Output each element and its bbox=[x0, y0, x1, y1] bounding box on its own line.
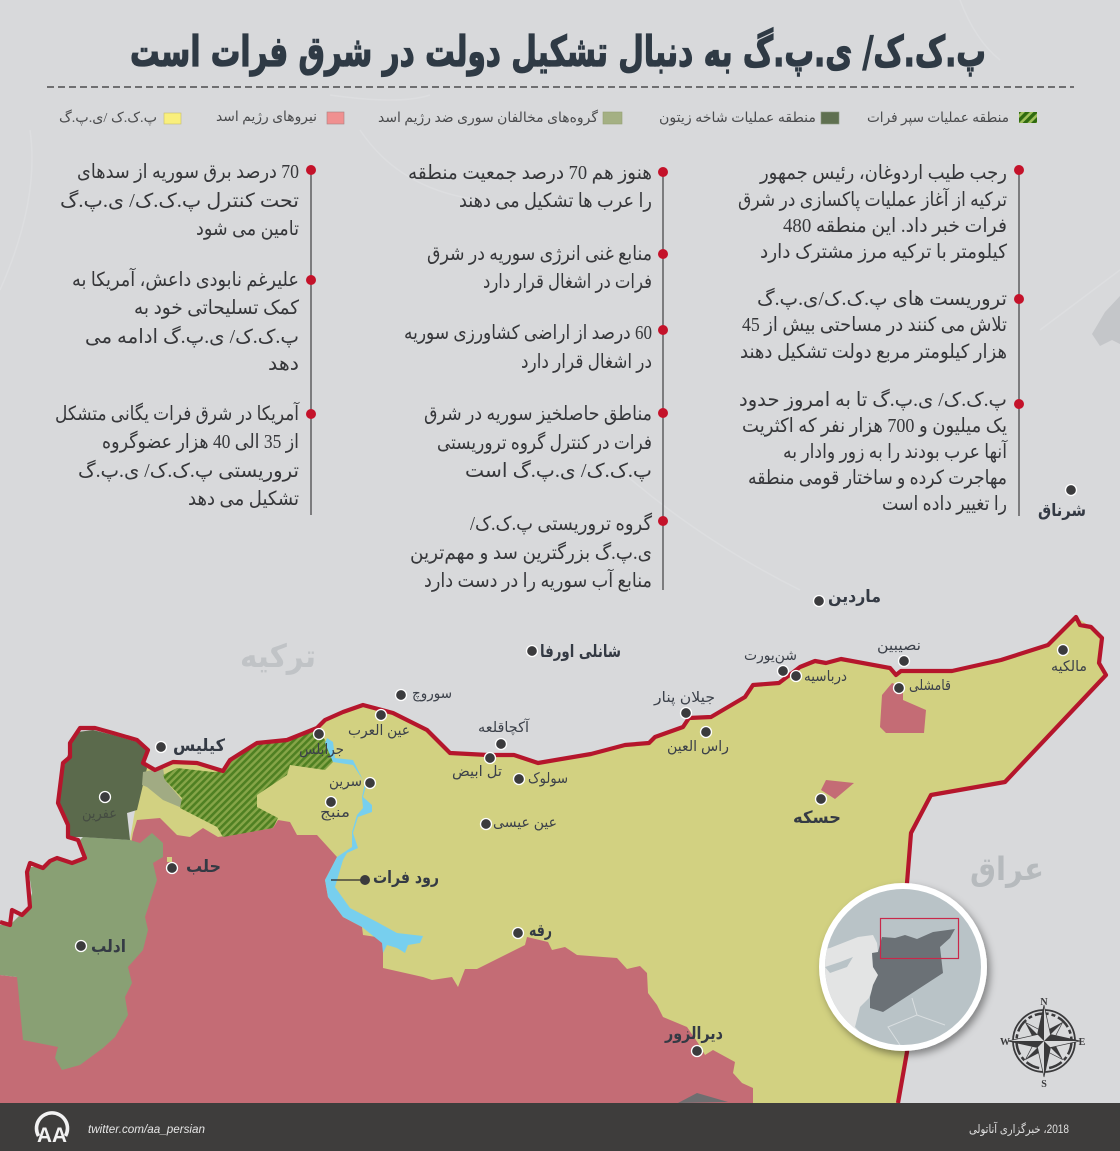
compass rose: W bbox=[1000, 1037, 1010, 1048]
city: Ras al-Ayn bbox=[667, 726, 729, 755]
map region: Afrin Olive Branch bbox=[58, 730, 147, 840]
city: Ayn al-Arab: عین العرب bbox=[348, 723, 410, 739]
map region: opposition pocket bbox=[142, 768, 182, 808]
city: Akcakale bbox=[478, 718, 530, 750]
panel: left text column: 70 درصد برق سوریه از سدهای bbox=[77, 162, 299, 183]
city: Ayn al-Arab bbox=[348, 710, 410, 739]
city: Suluk: سولوک bbox=[528, 771, 568, 787]
city: Manbij bbox=[320, 796, 350, 821]
city: Raqqa bbox=[512, 921, 552, 941]
footer: AA logo bbox=[36, 1113, 68, 1147]
city: Idlib: ادلب bbox=[91, 937, 126, 957]
city: Senyurt bbox=[744, 648, 797, 676]
country label: Turkey: ترکیه bbox=[240, 637, 316, 675]
footer: twitter handle: twitter.com/aa_persian bbox=[88, 1122, 205, 1136]
legend item: Euphrates Shield: منطقه عملیات سپر فرات bbox=[867, 111, 1009, 126]
footer: AA logo: AA bbox=[37, 1124, 67, 1147]
city: Nusaybin: نصیبین bbox=[877, 638, 921, 654]
inset: highlight rectangle bbox=[880, 918, 958, 958]
panel: right text column: فرات خبر داد. این منطقه 480 bbox=[783, 216, 1007, 237]
city: Tal Abyad: تل ابیض bbox=[452, 764, 502, 780]
legend item: opposition: گروه‌های مخالفان سوری ضد رژیم اسد bbox=[378, 109, 598, 126]
panel: right text column: رجب طیب اردوغان، رئیس جمهور bbox=[759, 163, 1007, 184]
footer bar bbox=[0, 1103, 1120, 1151]
city: Sanliurfa: شانلی اورفا bbox=[540, 642, 621, 662]
city: Jarablus: جرابلس bbox=[299, 742, 344, 758]
panel: left text column: تشکیل می دهد bbox=[188, 489, 299, 510]
city: Kilis: کیلیس bbox=[173, 736, 225, 756]
city: Tal Abyad bbox=[452, 752, 502, 780]
city: Qamishli: قامشلی bbox=[909, 678, 951, 694]
compass rose: N bbox=[1040, 997, 1048, 1008]
legend item: regime: نیروهای رژیم اسد bbox=[216, 110, 317, 125]
panel: right text column: هزار کیلومتر مربع دولت تشکیل دهند bbox=[740, 342, 1007, 363]
map region: regime red bbox=[0, 818, 753, 1103]
city: Ras al-Ayn: راس العین bbox=[667, 739, 729, 755]
panel: middle text column: فرات در اشغال قرار دارد bbox=[483, 272, 652, 293]
city: Afrin: عفرین bbox=[82, 806, 117, 822]
panel: right text column: تلاش می کنند در مساحتی بیش از 45 bbox=[742, 315, 1007, 336]
panel: right text column: را تغییر داده است bbox=[882, 494, 1007, 515]
city: Ceylanpinar: جیلان پنار bbox=[653, 690, 715, 706]
city: Hasakah bbox=[793, 794, 841, 828]
city: Malikiyah bbox=[1051, 644, 1087, 675]
city: Suluk bbox=[514, 771, 568, 787]
city: Aleppo: حلب bbox=[186, 857, 221, 877]
map region: Idlib opposition bbox=[0, 833, 163, 1070]
city: Raqqa: رقه bbox=[529, 921, 552, 941]
panel: left text column: از 35 الی 40 هزار عضوگروه bbox=[102, 430, 299, 453]
panel: middle text column bbox=[404, 163, 668, 592]
city: Hasakah: حسکه bbox=[793, 808, 841, 828]
city: Idlib bbox=[76, 937, 126, 957]
panel: middle text column: منابع آب سوریه را در دست دارد bbox=[424, 568, 652, 592]
Euphrates pointer line bbox=[331, 879, 365, 881]
city: Sirnak bbox=[1038, 484, 1086, 521]
city: Manbij: منبج bbox=[320, 805, 350, 821]
river: Euphrates bbox=[325, 738, 423, 953]
legend item: PKK: پ.ک.ک /ی.پ.گ bbox=[59, 108, 157, 126]
panel: left text column: تحت کنترل پ.ک.ک/ ی.پ.گ bbox=[60, 189, 299, 212]
panel: right text column bbox=[738, 163, 1024, 516]
city: Sarrin: سرین bbox=[329, 774, 362, 790]
panel: right text column: تروریست های پ.ک.ک/ی.پ.گ bbox=[757, 287, 1007, 310]
panel: right text column: کیلومتر با ترکیه مرز مشترک دارد bbox=[760, 242, 1008, 263]
panel: middle text column: هنوز هم 70 درصد جمعیت منطقه bbox=[408, 163, 652, 184]
city: Qamishli bbox=[894, 678, 951, 694]
city: Ceylanpinar bbox=[653, 690, 715, 718]
city: Jarablus bbox=[299, 728, 344, 758]
panel: middle text column: ی.پ.گ بزرگترین سد و مهم‌ترین bbox=[410, 541, 652, 564]
panel: middle text column: پ.ک.ک/ ی.پ.گ است bbox=[465, 459, 652, 482]
map region: PKK/YPG yellow bbox=[130, 617, 1106, 1103]
country label: Iraq: عراق bbox=[970, 850, 1044, 888]
panel: middle text column: مناطق حاصلخیز سوریه در شرق bbox=[424, 404, 652, 425]
city: Aleppo bbox=[166, 857, 221, 877]
city: Senyurt: شن‌یورت bbox=[744, 648, 797, 664]
city: Darbasiyah: درباسیه bbox=[804, 669, 847, 685]
border: Syrian frontier bbox=[0, 617, 1106, 1103]
panel: middle text column: منابع غنی انرژی سوریه در شرق bbox=[427, 244, 652, 265]
panel: middle text column: در اشغال قرار دارد bbox=[521, 352, 652, 373]
panel: middle text column: 60 درصد از اراضی کشاورزی سوریه bbox=[404, 323, 652, 344]
panel: right text column: یک میلیون و 700 هزار نفر که اکثریت bbox=[742, 416, 1007, 437]
panel: right text column: پ.ک.ک/ ی.پ.گ تا به امروز حدود bbox=[739, 388, 1007, 411]
city: Akcakale: آکچاقلعه bbox=[478, 718, 530, 736]
inset: Syria silhouette bbox=[870, 929, 955, 1012]
city: Malikiyah: مالکیه bbox=[1051, 659, 1087, 675]
city: Sirnak: شرناق bbox=[1038, 501, 1086, 521]
map region: Hasakah regime area bbox=[821, 780, 854, 799]
panel: left text column: دهد bbox=[268, 354, 299, 375]
city: Deir ez-Zor bbox=[664, 1024, 723, 1056]
legend item: Olive Branch: منطقه عملیات شاخه زیتون bbox=[659, 111, 816, 126]
panel: left text column: تروریستی پ.ک.ک/ ی.پ.گ bbox=[78, 459, 299, 482]
legend item: PKK bbox=[59, 108, 181, 126]
city: Suruc bbox=[396, 686, 452, 702]
map region: Euphrates Shield hatch bbox=[163, 728, 333, 837]
city: Mardin: ماردین bbox=[828, 587, 881, 607]
panel: right text column: آنها عرب بودند را به زور وادار به bbox=[783, 439, 1008, 463]
panel: left text column: علیرغم نابودی داعش، آمریکا به bbox=[72, 267, 299, 291]
panel: middle text column: گروه تروریستی پ.ک.ک/ bbox=[470, 512, 653, 535]
city: Suruc: سوروچ bbox=[412, 686, 452, 702]
panel: middle text column: را عرب ها تشکیل می دهند bbox=[459, 191, 652, 212]
panel: right text column: ترکیه از آغاز عملیات پاکسازی در شرق bbox=[738, 187, 1007, 211]
map region: Qamishli regime area bbox=[880, 683, 926, 733]
inset locator map bbox=[819, 883, 990, 1060]
panel: left text column: آمریکا در شرق فرات یگانی متشکل bbox=[55, 401, 300, 425]
compass rose bbox=[1000, 997, 1086, 1090]
city: Deir ez-Zor: دیرالزور bbox=[664, 1024, 723, 1044]
legend bbox=[59, 108, 1037, 126]
compass rose: E bbox=[1079, 1037, 1086, 1048]
panel: left text column: پ.ک.ک/ ی.پ.گ ادامه می bbox=[85, 325, 299, 348]
city: Nusaybin bbox=[877, 638, 921, 666]
city: Ayn Issa: عین عیسی bbox=[493, 815, 557, 831]
panel: left text column: کمک تسلیحاتی خود به bbox=[134, 298, 300, 319]
footer: credit: 2018، خبرگزاری آناتولی bbox=[969, 1121, 1069, 1137]
map bbox=[0, 484, 1106, 1103]
panel: middle text column: فرات در کنترل گروه تروریستی bbox=[437, 431, 652, 454]
label: Euphrates river: رود فرات bbox=[373, 868, 439, 888]
panel: left text column: تامین می شود bbox=[196, 219, 299, 240]
city: Sanliurfa bbox=[526, 642, 621, 662]
panel: right text column: مهاجرت کرده و ساختار قومی منطقه bbox=[748, 468, 1007, 489]
compass rose: S bbox=[1041, 1079, 1047, 1090]
panel: left text column bbox=[55, 162, 316, 515]
city: Afrin bbox=[82, 792, 117, 822]
